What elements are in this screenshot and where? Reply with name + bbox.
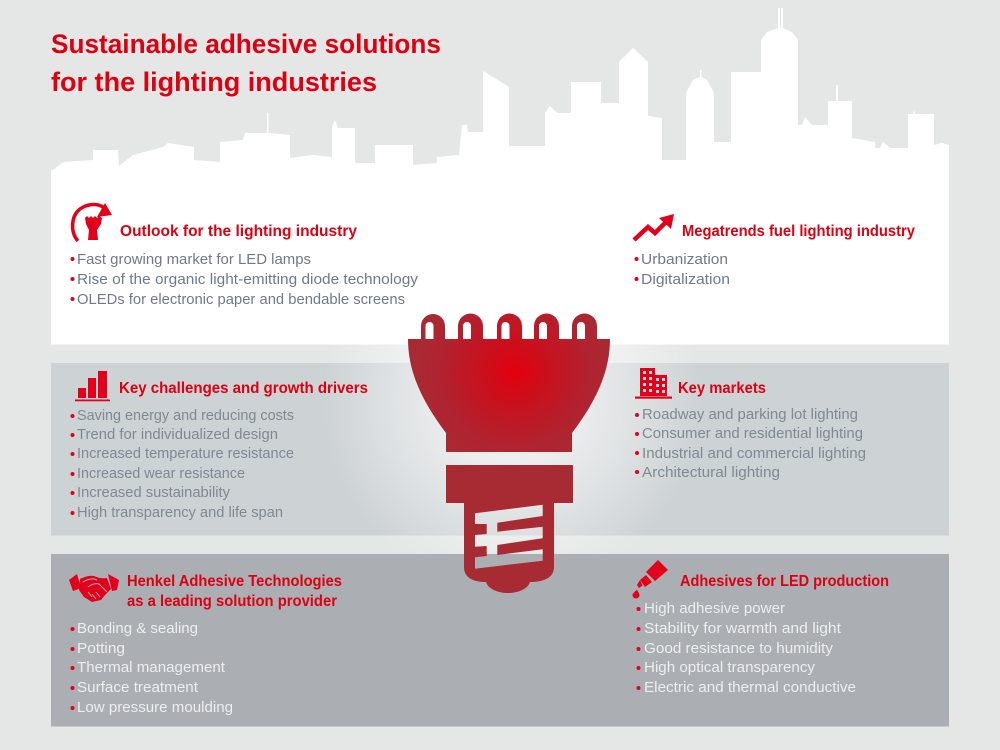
bullet list: Rise of the organic light-emitting diode technology — [77, 271, 418, 288]
bullet list — [635, 406, 866, 481]
panel content: megatrends — [634, 214, 915, 288]
heading: Megatrends fuel lighting industry — [682, 223, 915, 240]
heading: as a leading solution provider — [127, 593, 337, 610]
panel content: adhesives for LED production — [632, 560, 889, 696]
title: Sustainable adhesive solutions — [51, 29, 441, 59]
title — [51, 29, 441, 97]
heading: Key markets — [678, 380, 766, 397]
bullet list: Bonding & sealing — [77, 620, 198, 637]
bullet list: Stability for warmth and light — [644, 620, 842, 637]
bulb head with filament loops — [408, 314, 610, 452]
bullet list: Low pressure moulding — [77, 699, 233, 716]
panel content: outlook for the lighting industry — [70, 203, 418, 308]
bullet list — [70, 620, 233, 716]
icon: handshake — [69, 574, 119, 602]
bullet list: Industrial and commercial lighting — [642, 445, 866, 462]
light glow behind bulb — [322, 344, 702, 554]
heading: Henkel Adhesive Technologies — [127, 573, 342, 590]
title: for the lighting industries — [51, 67, 377, 97]
bullet list: Trend for individualized design — [77, 426, 278, 443]
bullet list: High optical transparency — [644, 659, 815, 676]
bullet list: Fast growing market for LED lamps — [77, 251, 311, 268]
panel: middle grey band — [51, 363, 949, 536]
bullet list: High adhesive power — [644, 600, 785, 617]
bullet list — [636, 600, 856, 696]
bullet list: Surface treatment — [77, 679, 199, 696]
bullet list: Electric and thermal conductive — [644, 679, 856, 696]
bullet list — [70, 251, 418, 308]
heading — [127, 573, 342, 610]
heading: Outlook for the lighting industry — [120, 223, 357, 240]
bullet list: Urbanization — [641, 251, 728, 268]
bullet list: High transparency and life span — [77, 504, 283, 521]
bullet list — [634, 251, 730, 288]
bullet list: Good resistance to humidity — [644, 640, 833, 657]
bullet list: OLEDs for electronic paper and bendable screens — [77, 291, 405, 308]
icon: office building — [635, 368, 672, 399]
icon: bulb with circular arrow — [73, 203, 112, 241]
icon: bar chart — [75, 371, 110, 401]
bulb screw base with thread cut-outs — [446, 465, 573, 593]
bullet list: Consumer and residential lighting — [642, 425, 863, 442]
bullet list — [70, 407, 294, 521]
skyline silhouette — [51, 8, 949, 180]
bullet list: Increased wear resistance — [77, 465, 245, 482]
heading: Adhesives for LED production — [680, 573, 889, 590]
icon: glue tube — [632, 560, 668, 598]
bullet list: Saving energy and reducing costs — [77, 407, 294, 424]
panel: bottom dark grey band — [51, 554, 949, 726]
bullet list: Architectural lighting — [642, 464, 780, 481]
bullet list: Potting — [77, 640, 125, 657]
icon: rising arrow — [634, 214, 674, 240]
light bulb illustration — [408, 314, 610, 593]
bullet list: Increased sustainability — [77, 484, 230, 501]
bullet list: Digitalization — [641, 271, 730, 288]
bullet list: Thermal management — [77, 659, 226, 676]
panel content: key challenges — [70, 371, 368, 521]
panel content: key markets — [635, 368, 866, 481]
bullet list: Increased temperature resistance — [77, 445, 294, 462]
bullet list: Roadway and parking lot lighting — [642, 406, 858, 423]
heading: Key challenges and growth drivers — [119, 380, 368, 397]
panel content: henkel adhesive technologies — [69, 573, 342, 716]
panel: white top band — [51, 170, 949, 344]
